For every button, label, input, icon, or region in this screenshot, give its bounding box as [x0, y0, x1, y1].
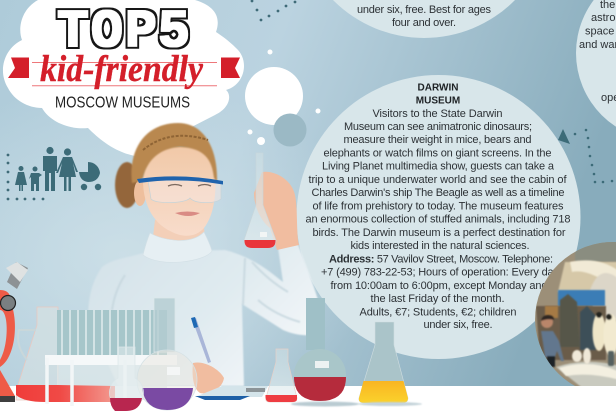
text: Darwin description: Charles Darwin's ship The Beagle as well as a timeline [312, 187, 564, 199]
text: Darwin address and prices: from 10:00am to 6:00pm, except Monday and [330, 280, 548, 292]
hair bun [115, 162, 139, 208]
text: Darwin description: elephants or watch films on giant screens. In the [324, 148, 552, 160]
text: top circle: four and over. [392, 17, 456, 29]
heading: Darwin Museum [416, 82, 460, 106]
bubbles [245, 50, 320, 146]
small round flask: red [109, 347, 143, 411]
text: Darwin address and prices: under six, free. [424, 319, 492, 331]
text: Darwin description: birds. The Darwin museum is a perfect destination for [312, 227, 566, 239]
text: Darwin description: Visitors to the State Darwin [372, 108, 502, 120]
text: Darwin description: of life from prehistory to today. The museum features [312, 200, 564, 212]
table [0, 386, 616, 411]
text: Darwin description [306, 108, 570, 252]
microscope [0, 262, 28, 402]
dots: left [7, 154, 44, 200]
jug with red liquid [16, 307, 58, 400]
panel: top museum circle [296, 0, 552, 38]
text: Darwin description: kids interested in the natural sciences. [350, 240, 530, 252]
writing hand [193, 362, 224, 393]
text: Darwin description: measure their weight in mice, bears and [344, 134, 532, 146]
panel: right museum circle [576, 0, 616, 141]
text: Darwin description: Living Planet multimedia show, guests can take a [322, 161, 555, 173]
ear [134, 180, 146, 206]
round flask: purple [137, 298, 197, 410]
heading: kid-friendly: kid-friendly [40, 49, 204, 90]
hand raised [254, 172, 299, 250]
round flask: red [291, 298, 359, 406]
boy [541, 315, 564, 367]
face [143, 147, 216, 236]
cloud with title [3, 0, 244, 156]
collar [143, 232, 212, 262]
text: Darwin address and prices: +7 (499) 783-22-53; Hours of operation: Every day [321, 267, 560, 279]
text: right circle fragments: space [585, 26, 614, 38]
text: Darwin description: trip to a unique underwater world and see the cabin of [308, 174, 567, 186]
heading: Darwin Museum: MUSEUM [416, 96, 460, 106]
text: Darwin address and prices: Adults, €7; Students, €2; children [360, 306, 516, 318]
girl [88, 123, 320, 393]
text: right circle fragments [579, 0, 616, 104]
arrow and dotted trail [558, 129, 613, 183]
text: top circle: under six, free. Best for ages [357, 4, 492, 16]
panel: Darwin Museum circle [296, 75, 580, 359]
penguins [592, 312, 616, 356]
photo: museum interior circle [530, 240, 616, 390]
text: Darwin description: Museum can see animatronic dinosaurs; [344, 121, 532, 133]
ribbon [8, 58, 240, 86]
clipboard [195, 386, 268, 400]
text: Darwin address and prices [321, 253, 560, 331]
text: Darwin address and prices: Address: 57 Vavilov Street, Moscow. Telephone: [329, 253, 553, 265]
icon: family with stroller [15, 147, 101, 191]
torso [88, 242, 320, 386]
shirt folds [112, 258, 300, 322]
hair [131, 123, 217, 183]
text: Darwin address and prices: the last Friday of the month. [370, 293, 504, 305]
heading: Darwin Museum: DARWIN [418, 82, 458, 93]
heading: TOP5: TOP5 [57, 2, 190, 62]
test tube rack [16, 310, 177, 406]
conical flask: yellow [358, 322, 422, 406]
flask held up [244, 153, 276, 248]
mouth [175, 212, 200, 216]
heading: Moscow Museums: MOSCOW MUSEUMS [55, 94, 190, 112]
dots: top [251, 0, 296, 21]
eyes [168, 184, 211, 186]
small conical flask [265, 349, 297, 402]
goggles [148, 180, 221, 203]
pen [192, 318, 211, 363]
neck [152, 220, 206, 245]
text: Darwin description: an enormous collection of stuffed animals, including 718 [306, 214, 570, 226]
display case [556, 361, 616, 386]
text: top circle [357, 4, 492, 29]
